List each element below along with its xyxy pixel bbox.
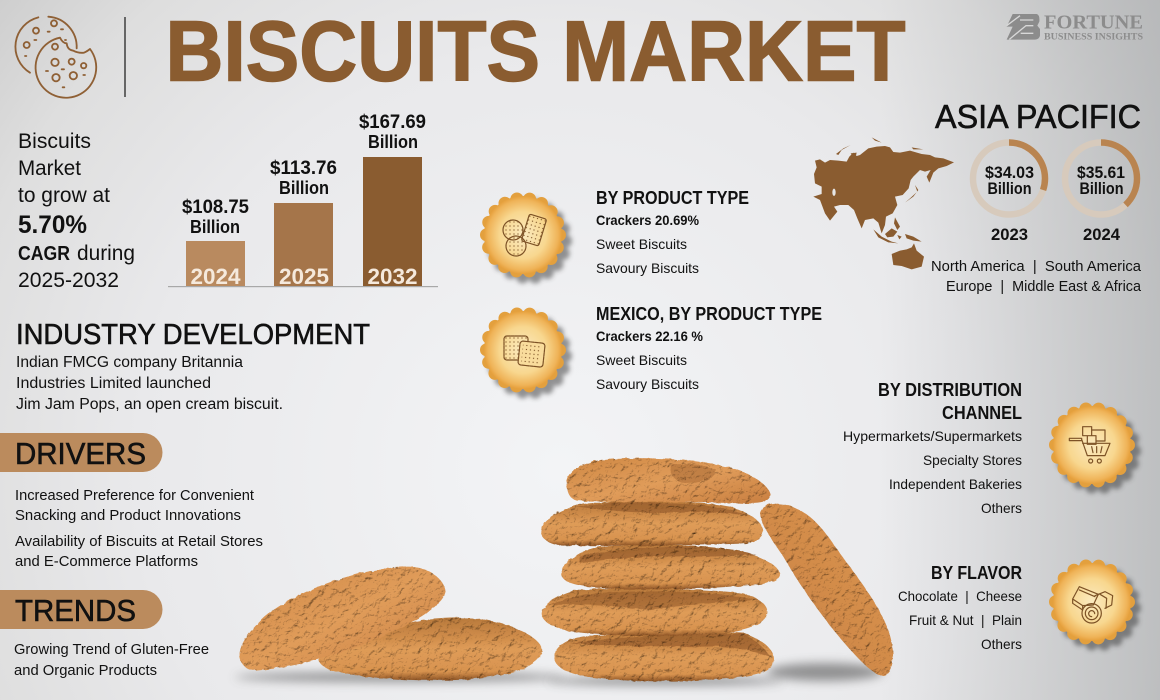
CAGR text block: 2025-2032	[18, 269, 119, 292]
panel: mexico by product type: MEXICO, BY PRODUCT TYPE	[596, 304, 822, 324]
panel: industry development	[16, 319, 370, 413]
donut 2023: $34.03	[985, 163, 1034, 182]
bar 2032: 2032	[368, 264, 418, 289]
icon: shopping cart badge	[1053, 406, 1134, 488]
icon: assorted crackers badge	[484, 196, 566, 278]
bar 2025: 2025	[279, 264, 329, 289]
CAGR text block: Market	[18, 157, 81, 180]
CAGR text block	[18, 130, 135, 292]
panel: trends: Growing Trend of Gluten-Free	[14, 641, 209, 658]
icon: square crackers badge	[484, 311, 566, 392]
panel: by product type	[484, 188, 749, 278]
logo: Fortune Business Insights: FORTUNE	[1044, 12, 1143, 34]
bar 2025: Billion	[279, 178, 329, 198]
donut 2024	[1065, 142, 1137, 244]
CAGR text block: during	[77, 242, 135, 265]
panel: by flavor: Fruit & Nut | Plain	[909, 612, 1022, 628]
title: BISCUITS MARKET	[166, 4, 906, 100]
panel: by flavor: Others	[981, 636, 1022, 652]
panel: asia pacific	[813, 98, 1142, 295]
photo: biscuit stack	[235, 458, 893, 685]
panel: drivers: Increased Preference for Convenient	[15, 487, 255, 504]
panel: asia pacific: North America | South America	[931, 258, 1142, 275]
panel: industry development: Jim Jam Pops, an open cream biscuit.	[16, 396, 283, 413]
CAGR text block: to grow at	[18, 184, 110, 207]
panel: mexico by product type: Sweet Biscuits	[596, 352, 687, 368]
panel: by flavor	[898, 563, 1134, 652]
panel: mexico by product type	[484, 304, 822, 392]
donut 2024: $35.61	[1077, 163, 1125, 182]
logo: Fortune Business Insights: BUSINESS INSIGHTS	[1044, 32, 1144, 42]
panel: mexico by product type: Savoury Biscuits	[596, 376, 699, 392]
panel: by distribution channel	[843, 380, 1134, 516]
bar 2024: Billion	[190, 217, 240, 237]
bar 2024	[182, 197, 249, 289]
panel: trends: and Organic Products	[14, 662, 157, 679]
logo: Fortune Business Insights	[1007, 12, 1144, 42]
bar 2024: $108.75	[182, 197, 249, 218]
donut 2023: Billion	[988, 180, 1032, 198]
panel: by distribution channel: Hypermarkets/Supermarkets	[843, 428, 1022, 444]
panel: by product type: Crackers 20.69%	[596, 212, 700, 228]
CAGR text block: 5.70%	[18, 211, 87, 239]
donut 2024: Billion	[1080, 180, 1124, 198]
panel: by flavor: BY FLAVOR	[931, 563, 1022, 583]
donut 2023: 2023	[991, 225, 1028, 244]
panel: mexico by product type: Crackers 22.16 %	[596, 328, 704, 344]
bar 2025: $113.76	[270, 158, 337, 179]
panel: trends: TRENDS	[15, 593, 136, 628]
panel: drivers	[0, 433, 263, 570]
bar 2032	[359, 112, 426, 289]
panel: industry development: INDUSTRY DEVELOPMENT	[16, 319, 370, 351]
CAGR text block: Biscuits	[18, 130, 91, 153]
panel: by product type: Savoury Biscuits	[596, 260, 699, 276]
panel: industry development: Indian FMCG company Britannia	[16, 354, 243, 371]
panel: by flavor: Chocolate | Cheese	[898, 588, 1022, 604]
panel: drivers: Snacking and Product Innovations	[15, 507, 241, 524]
map: Asia Pacific	[813, 137, 954, 269]
panel: drivers: Availability of Biscuits at Retail Stores	[15, 533, 263, 550]
bar 2025	[270, 158, 337, 289]
panel: by product type: BY PRODUCT TYPE	[596, 188, 749, 208]
panel: by product type: Sweet Biscuits	[596, 236, 687, 252]
panel: drivers: and E-Commerce Platforms	[15, 553, 198, 570]
bar 2032: Billion	[368, 132, 418, 152]
icon: chocolate and roll badge	[1053, 563, 1134, 644]
donut 2024: 2024	[1083, 225, 1121, 244]
panel: drivers: DRIVERS	[15, 436, 146, 471]
divider	[124, 17, 126, 97]
icon: biscuits logo	[15, 17, 96, 98]
bar 2024: 2024	[190, 264, 241, 289]
panel: by distribution channel: Independent Bakeries	[889, 476, 1022, 492]
panel: by distribution channel: Others	[981, 500, 1022, 516]
bar chart	[168, 112, 438, 289]
panel: by distribution channel: CHANNEL	[942, 403, 1022, 423]
panel: industry development: Industries Limited launched	[16, 375, 211, 392]
CAGR text block: CAGR	[18, 243, 70, 265]
donut 2023	[973, 142, 1045, 244]
panel: asia pacific: ASIA PACIFIC	[935, 98, 1141, 135]
panel: by distribution channel: Specialty Stores	[923, 452, 1022, 468]
panel: asia pacific: Europe | Middle East & Africa	[946, 278, 1142, 295]
panel: trends	[0, 590, 209, 679]
panel: by distribution channel: BY DISTRIBUTION	[878, 380, 1022, 400]
bar 2032: $167.69	[359, 112, 426, 133]
